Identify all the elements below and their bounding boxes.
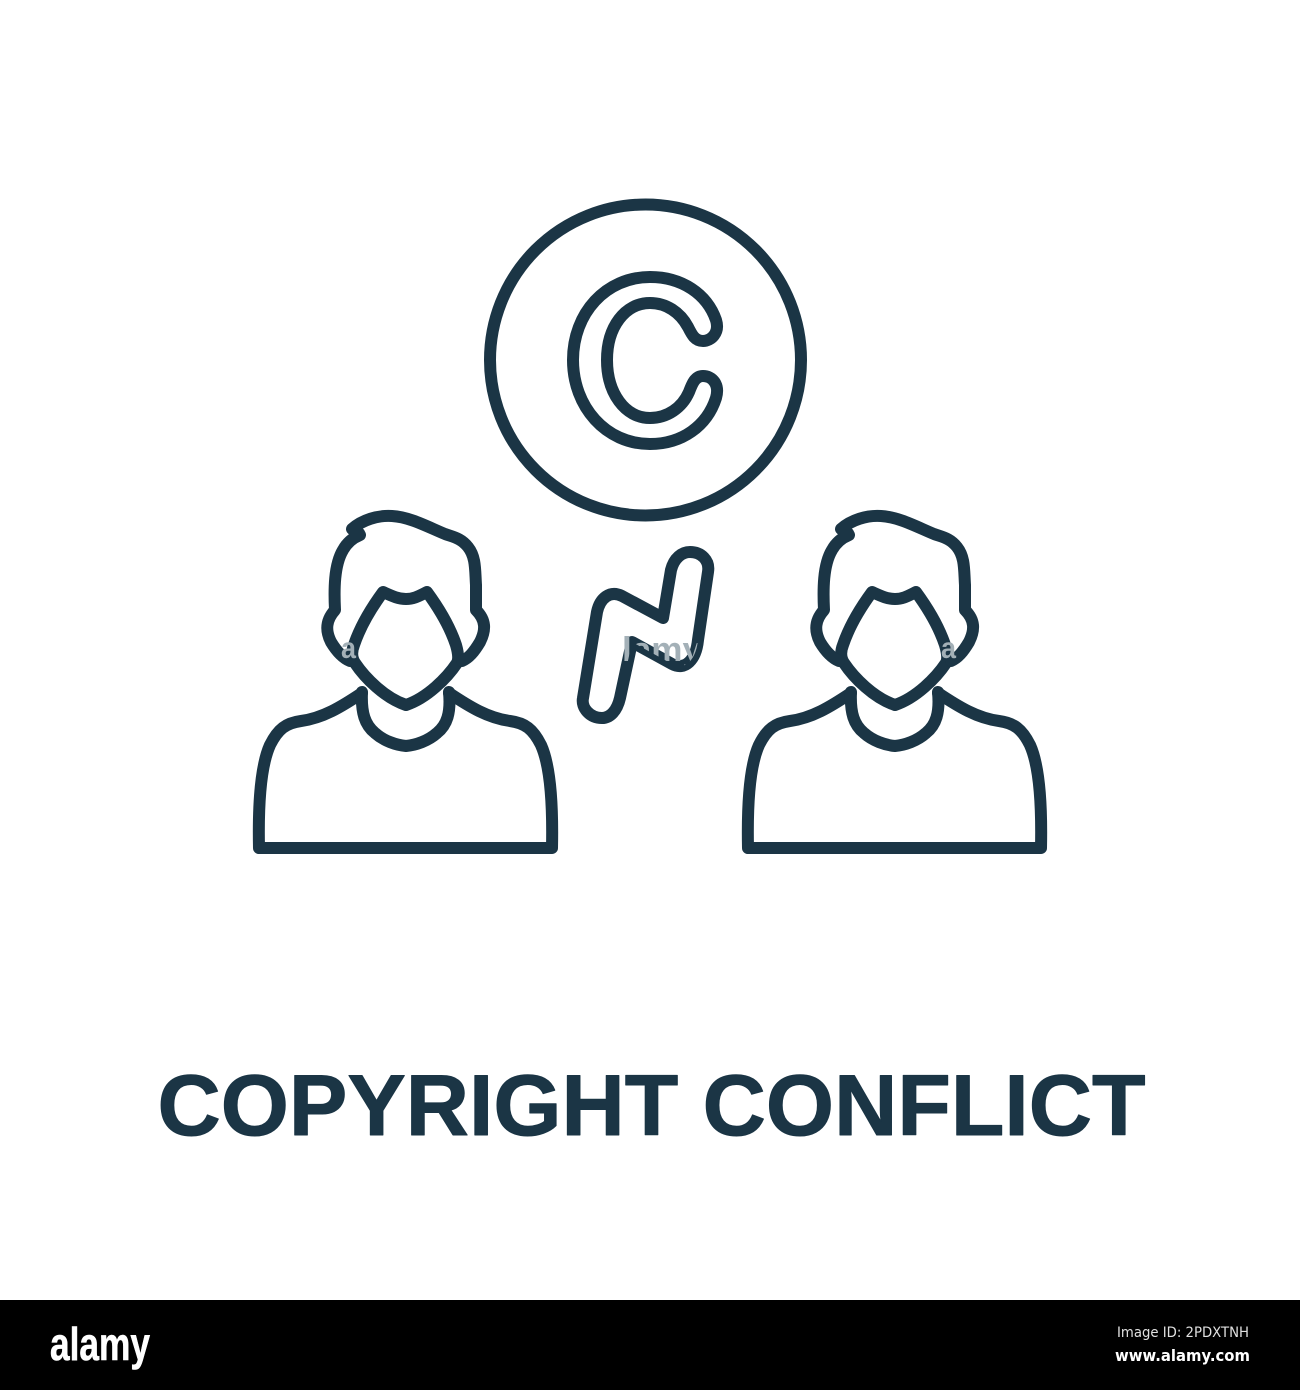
icon: lightning bolt — [583, 552, 708, 718]
watermark letter right: a — [941, 632, 956, 665]
footer bar — [0, 1300, 1300, 1390]
icon: left person — [259, 516, 552, 848]
icon: right person — [748, 516, 1041, 848]
watermark letter left: a — [341, 632, 356, 665]
image id: Image ID: 2PDXTNH — [1117, 1325, 1249, 1341]
title: COPYRIGHT CONFLICT — [158, 1058, 1146, 1154]
icon: copyright symbol — [490, 204, 801, 516]
logo: alamy: alamy — [50, 1318, 150, 1370]
website: www.alamy.com — [1115, 1346, 1250, 1365]
watermark on bolt: lamy — [622, 631, 702, 669]
